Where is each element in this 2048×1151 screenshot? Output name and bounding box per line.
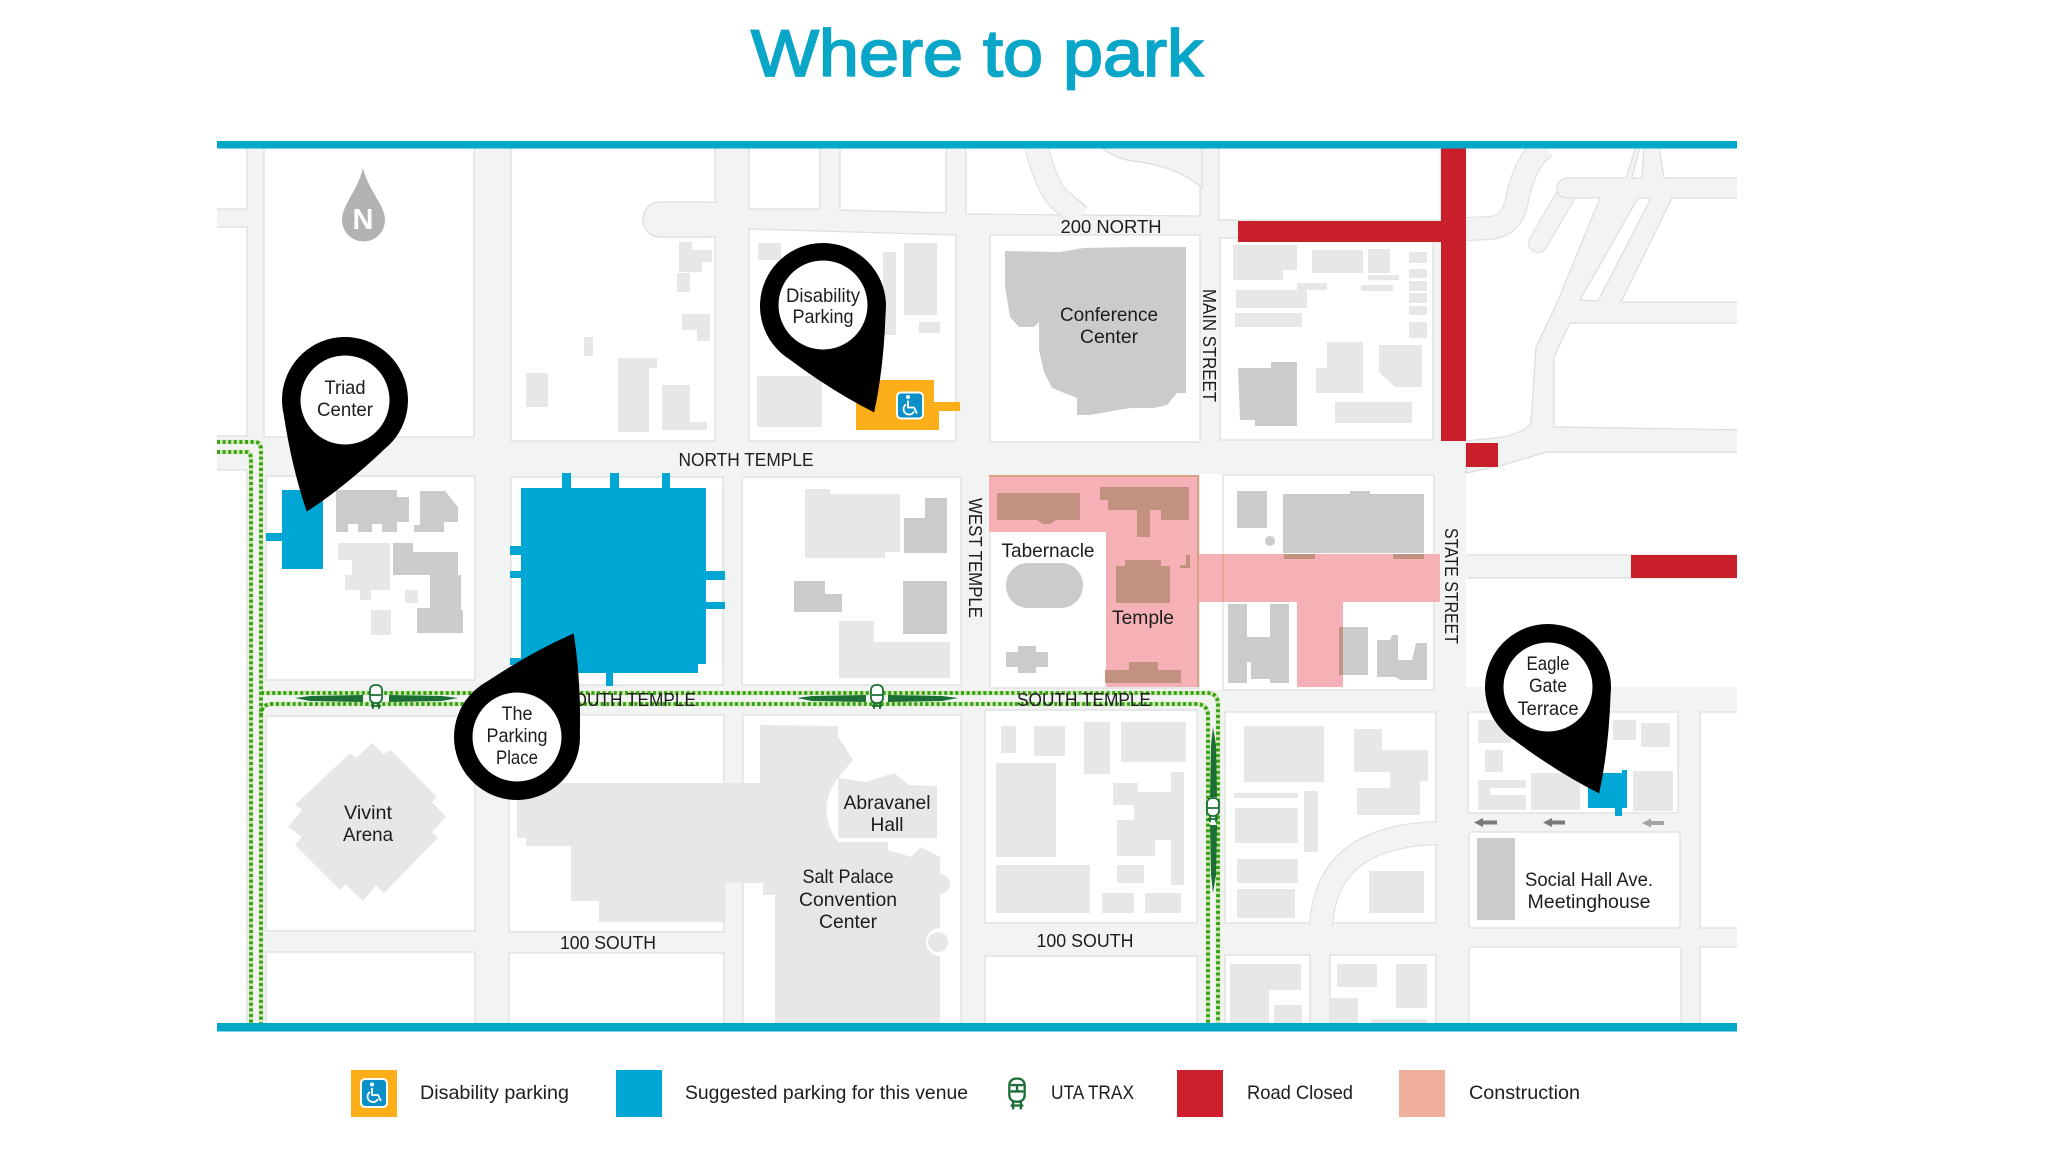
street labels: 100 SOUTH bbox=[560, 932, 656, 953]
street labels: SOUTH TEMPLE bbox=[1017, 689, 1151, 710]
building labels: Center bbox=[1080, 326, 1138, 348]
street labels: NORTH TEMPLE bbox=[678, 449, 814, 470]
pin: The Parking Place: The bbox=[502, 703, 532, 725]
building labels: Salt Palace bbox=[802, 866, 894, 888]
building labels: Vivint bbox=[344, 802, 393, 824]
title: Where to park bbox=[751, 16, 1204, 90]
building labels: Social Hall Ave. bbox=[1525, 869, 1653, 891]
building labels: Arena bbox=[343, 824, 393, 846]
pin: Disability Parking bbox=[739, 222, 931, 440]
one-way arrows bbox=[1474, 818, 1664, 828]
icon: train station 1 bbox=[370, 685, 382, 709]
building labels: Convention bbox=[799, 889, 897, 911]
pin: Eagle Gate Terrace: Gate bbox=[1529, 675, 1567, 697]
legend: UTA TRAX: UTA TRAX bbox=[1051, 1082, 1134, 1104]
building labels: Hall bbox=[870, 814, 904, 836]
building: abravanel hall bbox=[838, 773, 937, 838]
pin: Disability Parking: Disability bbox=[786, 285, 860, 307]
icon: train station 3 bbox=[1207, 798, 1219, 822]
icon: north marker: N bbox=[353, 204, 373, 236]
pin: Triad Center: Triad bbox=[324, 377, 366, 399]
pin: The Parking Place: Place bbox=[496, 747, 538, 769]
building labels: Center bbox=[819, 911, 877, 933]
UTA TRAX lines bbox=[217, 442, 1219, 1023]
pin: Triad Center bbox=[247, 320, 425, 532]
parking: disability lot bbox=[856, 380, 960, 430]
legend: road closed: Road Closed bbox=[1247, 1082, 1353, 1104]
legend: road closed bbox=[1177, 1070, 1353, 1117]
construction zone bbox=[989, 475, 1440, 687]
building: meetinghouse bbox=[1477, 838, 1515, 920]
pin: The Parking Place: Parking bbox=[486, 725, 548, 747]
building labels bbox=[343, 304, 1653, 933]
pin: Eagle Gate Terrace bbox=[1464, 603, 1656, 821]
icon: north marker bbox=[342, 168, 385, 242]
legend: suggested parking: Suggested parking for this venue bbox=[685, 1082, 968, 1104]
parking: suggested lots bbox=[266, 473, 1627, 816]
building: assembly hall bbox=[1006, 646, 1048, 673]
legend bbox=[351, 1070, 1580, 1117]
legend: construction: Construction bbox=[1469, 1082, 1580, 1104]
map bottom border bbox=[217, 1023, 1737, 1032]
street labels bbox=[560, 216, 1462, 953]
road network bbox=[210, 140, 1756, 1030]
legend: UTA TRAX bbox=[1009, 1079, 1134, 1109]
building labels: Temple bbox=[1112, 607, 1174, 629]
right side area bbox=[1466, 140, 1756, 687]
map bbox=[210, 140, 1756, 1030]
street labels: 100 SOUTH bbox=[1036, 930, 1134, 951]
building labels: Tabernacle bbox=[1002, 540, 1094, 562]
pin: Eagle Gate Terrace: Terrace bbox=[1518, 698, 1578, 720]
buildings bbox=[288, 242, 1673, 1023]
street labels: 200 NORTH bbox=[1060, 216, 1162, 237]
building: tabernacle dome bbox=[1006, 563, 1083, 608]
legend: construction bbox=[1399, 1070, 1580, 1117]
street labels: MAIN STREET bbox=[1199, 289, 1220, 402]
building labels: Abravanel bbox=[844, 792, 930, 814]
building labels: Meetinghouse bbox=[1528, 891, 1650, 913]
pin: The Parking Place bbox=[431, 603, 629, 823]
street labels: STATE STREET bbox=[1441, 528, 1462, 644]
building: salt palace bbox=[517, 725, 950, 1023]
building labels: Conference bbox=[1060, 304, 1158, 326]
pin: Eagle Gate Terrace: Eagle bbox=[1526, 653, 1570, 675]
map top border bbox=[217, 141, 1737, 148]
road closures bbox=[1238, 148, 1737, 578]
legend: suggested parking bbox=[616, 1070, 968, 1117]
icon: train station 2 bbox=[871, 685, 883, 709]
legend: disability parking bbox=[351, 1070, 569, 1117]
pin: Triad Center: Center bbox=[317, 399, 373, 421]
building: vivint arena bbox=[288, 743, 446, 901]
building: conference center bbox=[1005, 247, 1186, 415]
pin: Disability Parking: Parking bbox=[792, 306, 854, 328]
icon: wheelchair bbox=[897, 392, 923, 418]
legend: disability parking: Disability parking bbox=[420, 1082, 569, 1104]
street labels: WEST TEMPLE bbox=[965, 498, 986, 618]
street labels: SOUTH TEMPLE bbox=[562, 689, 696, 710]
